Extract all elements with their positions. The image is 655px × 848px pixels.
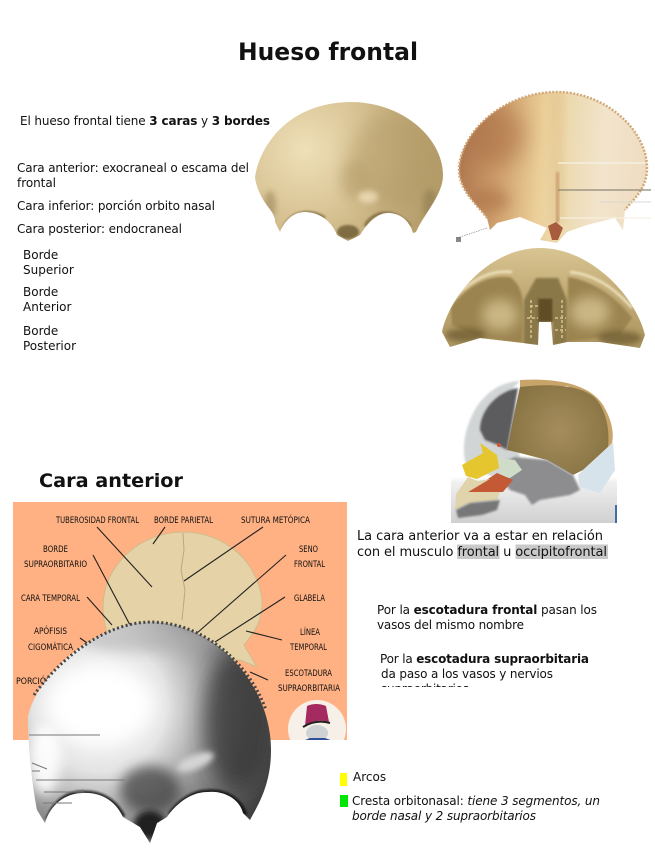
borde posterior: Posterior (23, 339, 76, 353)
poster labels: SUPRAORBITARIA (278, 684, 341, 694)
text block: escotadura supraorbitaria (381, 654, 588, 687)
list of faces (17, 161, 249, 236)
occipital light blue (578, 442, 615, 493)
pointer lines (29, 735, 125, 803)
dark sphenoid region (480, 388, 518, 450)
highlight: occipitofrontal (516, 544, 608, 559)
line 2: con el musculo frontal u occipitofrontal (357, 545, 607, 560)
outer skull shell (464, 381, 520, 480)
cara anterior: Cara anterior: exocraneal o escama del (17, 161, 249, 175)
image: frontal bone anterior view (255, 102, 443, 241)
yellow swatch (340, 773, 347, 786)
poster labels: LÍNEA (300, 626, 321, 638)
poster labels: SUPRAORBITARIO (24, 560, 87, 570)
cara posterior: Cara posterior: endocraneal (17, 222, 182, 236)
image: skull sagittal section (451, 378, 617, 523)
list of borders (23, 248, 76, 353)
poster labels: SUTURA METÓPICA (241, 514, 311, 526)
image: frontal bone inferior view (442, 248, 645, 348)
poster labels: ESCOTADURA (285, 669, 333, 679)
arcos label: Arcos (353, 770, 386, 784)
image: frontal bone endocranial view (456, 92, 651, 243)
title: Hueso frontal (238, 38, 418, 66)
poster labels: CIGOMÁTICA (28, 641, 74, 653)
skull base gray (500, 457, 580, 505)
line 1: La cara anterior va a estar en relación (357, 529, 603, 544)
poster labels: GLABELA (294, 594, 326, 604)
panel: labelled frontal bone poster (13, 502, 347, 758)
skull background (451, 378, 617, 523)
author avatar (288, 700, 346, 740)
borde anterior: Borde (23, 285, 58, 299)
text block: escotadura frontal: Por la escotadura frontal pasan los (377, 603, 597, 617)
borde anterior: Anterior (23, 300, 72, 314)
text block: escotadura supraorbitaria: supraorbitarios (381, 682, 469, 696)
poster labels: TEMPORAL (289, 643, 327, 653)
teeth (456, 500, 500, 518)
poster labels: PORCIÓN (16, 675, 52, 687)
poster labels: BORDE (43, 545, 68, 555)
poster labels (16, 514, 341, 694)
text block: musculo relation (357, 529, 608, 560)
borde superior: Borde (23, 248, 58, 262)
poster labels: SENO (299, 545, 318, 555)
poster labels: FRONTAL (294, 560, 325, 570)
poster labels: APÓFISIS (34, 625, 67, 637)
bone illustration (103, 532, 262, 667)
green swatch (340, 795, 348, 807)
cresta label: Cresta orbitonasal: tiene 3 segmentos, un (352, 794, 600, 808)
intro text: El hueso frontal tiene 3 caras y 3 bordes (20, 114, 270, 128)
cresta label line 2: borde nasal y 2 supraorbitarios (352, 809, 536, 823)
legend: cresta orbitonasal (340, 794, 600, 823)
poster background (13, 502, 347, 740)
pale green bone (497, 458, 522, 478)
frontal bone rim (520, 380, 613, 447)
poster labels: BORDE PARIETAL (154, 516, 213, 526)
blue edge bar (615, 505, 617, 523)
borde superior: Superior (23, 263, 74, 277)
maxilla beige (455, 477, 500, 510)
cara inferior: Cara inferior: porción orbito nasal (17, 199, 215, 213)
text block: escotadura frontal line 2: vasos del mismo nombre (377, 618, 524, 632)
orange dot (497, 443, 501, 447)
borde posterior: Borde (23, 324, 58, 338)
pointer arrows (80, 527, 286, 680)
image: grayscale frontal bone (28, 622, 272, 843)
highlight: frontal (457, 544, 500, 559)
legend: arcos (340, 770, 386, 786)
metopic suture (181, 533, 185, 620)
brown cranial wall (507, 385, 609, 475)
poster labels: CARA TEMPORAL (21, 594, 80, 604)
heading: cara anterior: Cara anterior (39, 470, 184, 492)
cara anterior line 2: frontal (17, 176, 56, 190)
text block: escotadura supraorbitaria: da paso a los vasos y nervios (381, 667, 553, 681)
yellow bone (462, 443, 499, 479)
red bone (468, 473, 513, 492)
pointer lines (456, 163, 651, 242)
poster labels: TUBEROSIDAD FRONTAL (55, 516, 139, 526)
text block: escotadura supraorbitaria: Por la escotadura supraorbitaria (380, 652, 589, 666)
